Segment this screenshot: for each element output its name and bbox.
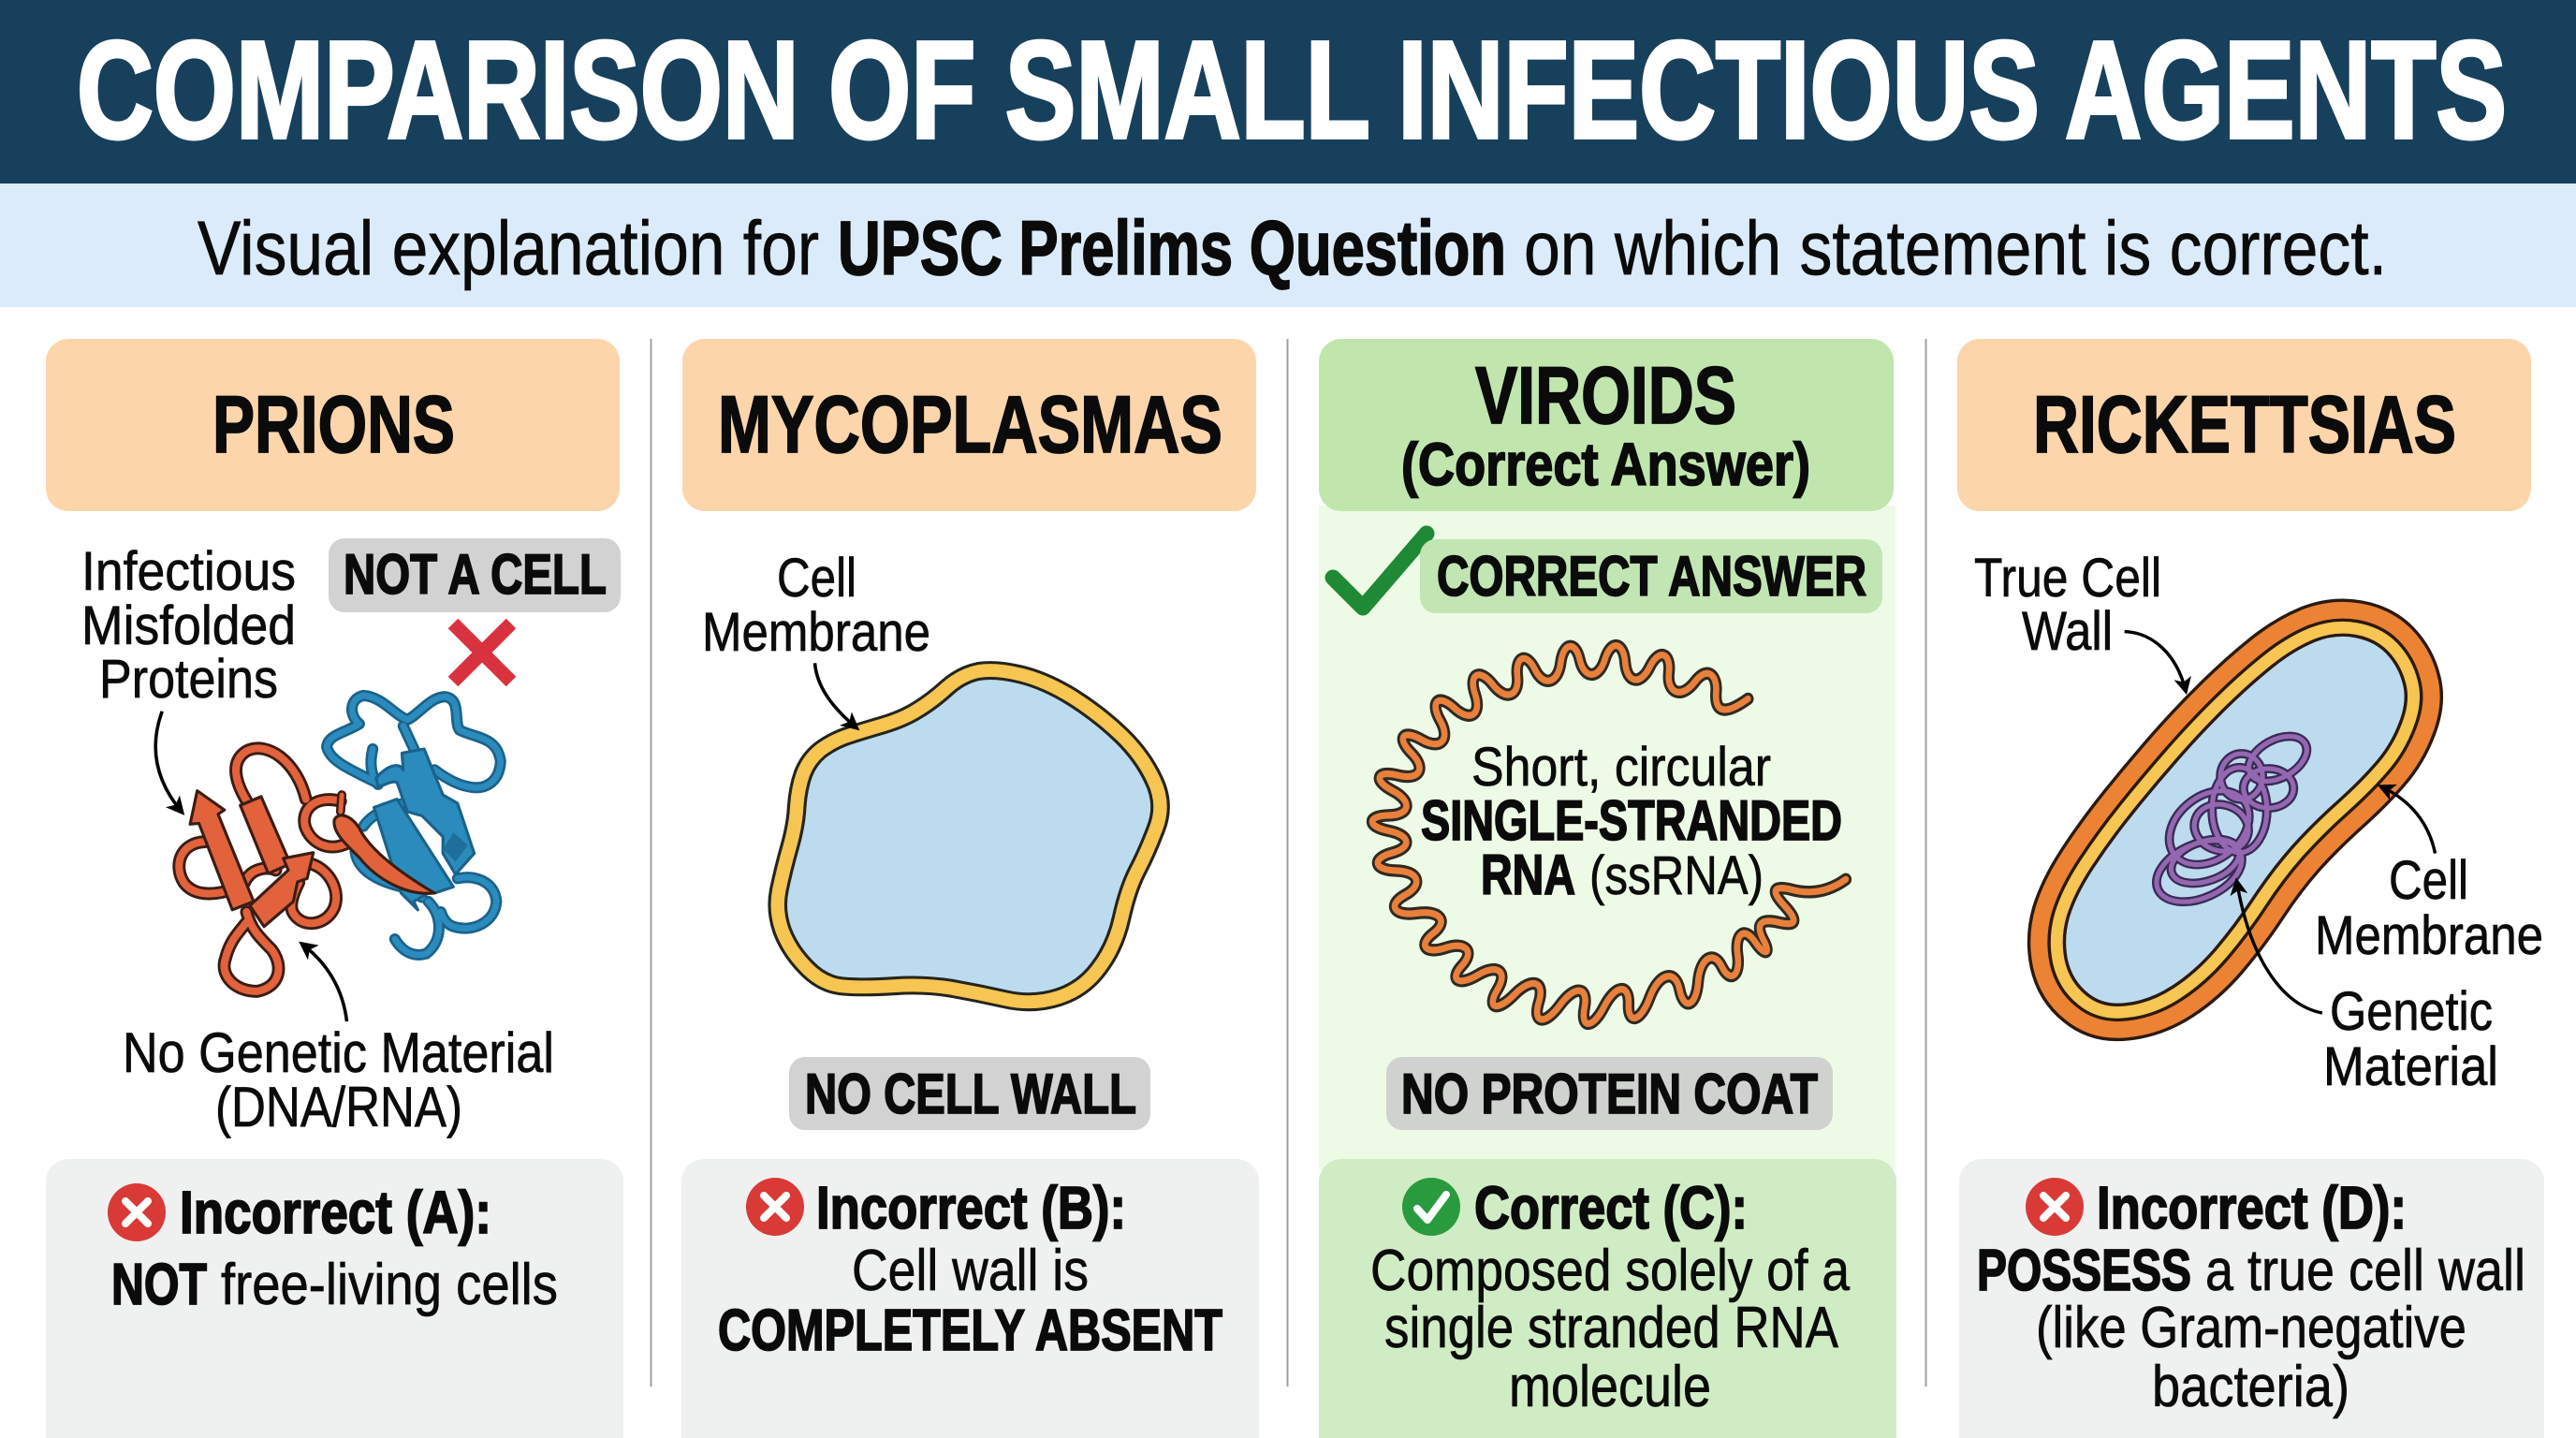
heading: mycoplasmas [682, 339, 1256, 511]
genetic material coil [2146, 727, 2315, 914]
label: infectious misfolded proteins: Proteins [99, 649, 278, 710]
illustration: misfolded protein [155, 696, 501, 1021]
heading: prions [46, 339, 620, 511]
illustration: mycoplasma cell [778, 663, 1161, 1002]
badge: not a cell: NOT A CELL [344, 543, 607, 606]
heading: rickettsias [1957, 339, 2531, 511]
arrow: to genetic material [2236, 881, 2322, 1013]
verdict card: incorrect B: Cell wall is [852, 1239, 1089, 1303]
label: genetic material: Genetic [2330, 981, 2493, 1042]
verdict card: correct C: single stranded RNA [1384, 1296, 1839, 1360]
verdict card: incorrect B [681, 1159, 1259, 1438]
panel: viroids [1319, 339, 1896, 1438]
label: infectious misfolded proteins [81, 541, 296, 710]
arrow: to misfolded proteins [155, 712, 183, 813]
verdict card: incorrect A: Incorrect (A): [180, 1179, 491, 1246]
icon: red cross [453, 624, 511, 682]
arrow: to no genetic material [301, 944, 347, 1021]
label: true cell wall: Wall [2022, 601, 2113, 662]
label: no genetic material: (DNA/RNA) [215, 1076, 462, 1138]
illustration: circular ssRNA strand [1372, 646, 1846, 1023]
heading: rickettsias: RICKETTSIAS [2033, 380, 2456, 470]
heading: mycoplasmas: MYCOPLASMAS [718, 380, 1222, 470]
label: true cell wall: True Cell [1974, 548, 2161, 609]
label: cell membrane [702, 548, 930, 663]
protein: blue domain [327, 696, 501, 955]
label: ssRNA description: SINGLE-STRANDED [1421, 789, 1842, 852]
arrow: to cell membrane [2380, 786, 2436, 854]
subtitle band: on which statement is correct. [1524, 206, 2387, 291]
label: cell membrane: Cell [777, 548, 856, 609]
subtitle band: UPSC Prelims Question [838, 206, 1506, 291]
heading: viroids: (Correct Answer) [1401, 431, 1810, 498]
verdict card: incorrect D: a true cell wall [2205, 1239, 2525, 1303]
badge: no protein coat: NO PROTEIN COAT [1401, 1063, 1818, 1125]
panel: prions [46, 339, 623, 1438]
panel: rickettsias [1957, 339, 2544, 1438]
heading: viroids [1319, 339, 1894, 511]
verdict card: incorrect D: bacteria) [2152, 1355, 2349, 1419]
panel: mycoplasmas [681, 339, 1259, 1438]
badge: correct answer [1420, 539, 1882, 613]
badge: no cell wall [789, 1057, 1150, 1130]
label: cell membrane: Membrane [702, 602, 930, 663]
verdict card: incorrect B: COMPLETELY ABSENT [718, 1299, 1222, 1363]
label: infectious misfolded proteins: Misfolded [81, 595, 296, 656]
verdict card: incorrect A: NOT [111, 1253, 207, 1317]
subtitle band [0, 183, 2576, 307]
verdict card: incorrect D: POSSESS [1977, 1239, 2191, 1303]
label: ssRNA description: (ssRNA) [1589, 845, 1764, 906]
verdict card: correct C: Composed solely of a [1370, 1239, 1850, 1303]
label: no genetic material [123, 1021, 554, 1138]
label: genetic material [2323, 981, 2498, 1097]
verdict card: incorrect A [46, 1159, 623, 1438]
verdict card: incorrect B: Incorrect (B): [816, 1174, 1126, 1241]
icon: green check circle [1402, 1178, 1460, 1236]
label: ssRNA description: Short, circular [1471, 737, 1771, 798]
heading: prions: PRIONS [212, 380, 455, 470]
badge: not a cell [329, 538, 621, 612]
protein: red domain [179, 748, 434, 991]
icon: red cross circle [2026, 1178, 2084, 1236]
subtitle band: Visual explanation for [198, 206, 819, 291]
icon: red cross circle [108, 1183, 166, 1241]
verdict card: incorrect D: (like Gram-negative [2036, 1296, 2466, 1360]
badge: no cell wall: NO CELL WALL [805, 1063, 1136, 1125]
label: cell membrane: Membrane [2315, 905, 2543, 966]
label: ssRNA description: RNA [1481, 844, 1575, 906]
heading: viroids: VIROIDS [1475, 351, 1736, 441]
verdict card: correct C: Correct (C): [1474, 1174, 1748, 1241]
label: cell membrane [2315, 850, 2543, 966]
badge: correct answer: CORRECT ANSWER [1437, 545, 1866, 608]
label: ssRNA description [1421, 737, 1842, 906]
illustration: rickettsia bacterium [2056, 627, 2436, 1013]
icon: green check mark [1333, 534, 1427, 608]
label: genetic material: Material [2323, 1036, 2498, 1097]
verdict card: incorrect D: Incorrect (D): [2097, 1174, 2407, 1241]
arrow: to cell wall [2125, 632, 2186, 692]
icon: red cross circle [746, 1178, 804, 1236]
label: true cell wall [1974, 548, 2161, 662]
verdict card: correct C [1319, 1159, 1896, 1438]
arrow: to membrane [815, 663, 856, 728]
verdict card: incorrect D [1959, 1159, 2544, 1438]
label: no genetic material: No Genetic Material [123, 1021, 554, 1084]
label: cell membrane: Cell [2389, 850, 2468, 911]
verdict card: correct C: molecule [1509, 1355, 1711, 1419]
verdict card: incorrect A: free-living cells [221, 1253, 558, 1317]
label: infectious misfolded proteins: Infectious [81, 541, 296, 602]
